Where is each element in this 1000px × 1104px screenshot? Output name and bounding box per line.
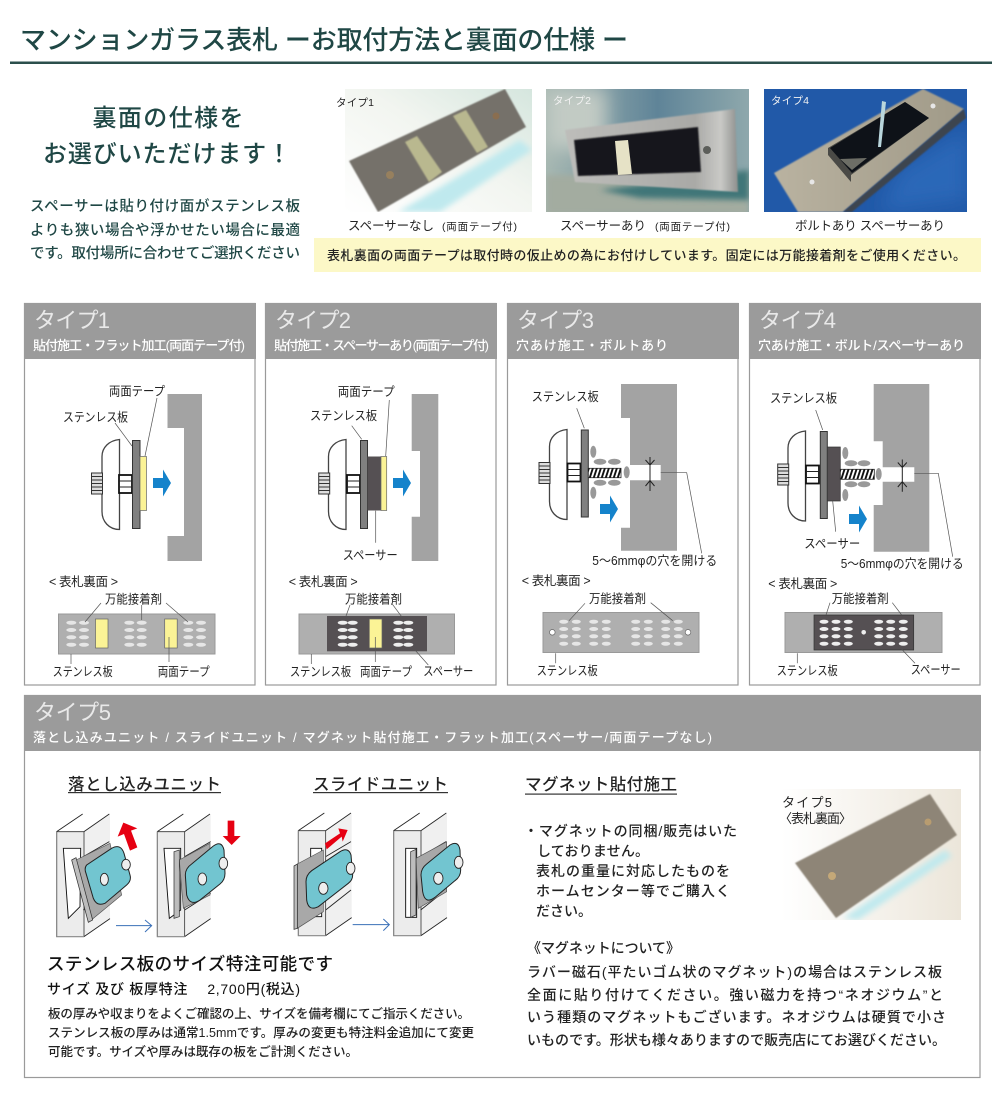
panel: type 1 — [24, 303, 256, 685]
type 3 back view: ステンレス板 — [537, 664, 598, 678]
drop-in step 1 — [57, 814, 137, 937]
type 4 mounting diagram: ステンレス板 — [770, 392, 837, 406]
magnet explanation: いう種類のマグネットもございます。ネオジウムは硬質で小さ — [527, 1009, 946, 1025]
magnet availability text: 表札の重量に対応したものを — [536, 863, 730, 879]
intro heading: お選びいただけます！ — [43, 141, 291, 168]
type 4 mounting diagram: スペーサー — [804, 537, 860, 551]
custom size note: 板の厚みや収まりをよくご確認の上、サイズを備考欄にてご指示ください。 — [48, 1006, 470, 1021]
panel: type 3 — [507, 303, 739, 685]
type 1 header — [24, 303, 256, 359]
photo label: type 4: タイプ4 — [771, 95, 809, 107]
type 2 back view: < 表札裏面 > — [289, 575, 358, 589]
photo label: type 5: タイプ5 — [782, 795, 832, 810]
type 4 mounting diagram — [770, 384, 964, 571]
magnet availability text — [524, 823, 737, 919]
callout: adhesive note — [314, 238, 981, 272]
title: マンションガラス表札 ーお取付方法と裏面の仕様 ー — [20, 25, 628, 55]
callout: adhesive note: 表札裏面の両面テープは取付時の仮止めの為にお付けしています。固定には万能接着剤をご使用ください。 — [327, 248, 966, 263]
slide step 1 — [294, 813, 355, 936]
intro text block — [30, 197, 300, 262]
type 5 header: 落とし込みユニット / スライドユニット / マグネット貼付施工・フラット加工(スペーサー/両面テープなし) — [33, 730, 712, 745]
type 1 back view: ステンレス板 — [53, 665, 113, 679]
photo: type 4 back — [764, 89, 967, 212]
type 1 back view: 両面テープ — [158, 665, 210, 679]
type 4 header: 穴あけ施工・ボルト/スペーサーあり — [758, 338, 965, 353]
photo: type 5 back — [781, 789, 961, 920]
heading: magnet mounting: マグネット貼付施工 — [525, 775, 677, 794]
photo captions: スペーサーあり — [560, 219, 646, 233]
photo label: type 5 — [779, 795, 852, 826]
photo label: type 5: 〈表札裏面〉 — [779, 811, 852, 826]
intro text block: スペーサーは貼り付け面がステンレス板 — [30, 197, 300, 215]
diagram: slide unit steps — [294, 813, 463, 936]
type 4 header — [749, 303, 981, 359]
type 4 header: タイプ4 — [759, 308, 836, 333]
panel: type 5 — [24, 695, 981, 1078]
type 2 back view: ステンレス板 — [290, 665, 351, 679]
type 2 header — [265, 303, 497, 359]
type 5 header — [24, 695, 981, 751]
photo captions: ボルトあり スペーサーあり — [795, 219, 945, 233]
panel: type 2 — [265, 303, 497, 685]
intro text block: です。取付場所に合わせてご選択ください — [30, 244, 300, 262]
type 3 mounting diagram: 5～6mmφの穴を開ける — [592, 554, 717, 568]
magnet explanation: 《マグネットについて》 — [527, 940, 680, 956]
magnet availability text: ・マグネットの同梱/販売はいた — [524, 823, 737, 839]
photo captions: (両面テープ付) — [655, 220, 730, 233]
intro heading — [43, 105, 291, 168]
type 2 mounting diagram: 両面テープ — [338, 385, 395, 399]
type 1 mounting diagram: 両面テープ — [109, 384, 165, 398]
type 4 back view: < 表札裏面 > — [768, 577, 837, 591]
type 2 mounting diagram: ステンレス板 — [310, 409, 377, 423]
magnet explanation: いものです。形状も様々ありますので販売店にてお選びください。 — [527, 1032, 946, 1048]
drop-in step 2 — [157, 814, 241, 937]
custom size note — [47, 954, 474, 1059]
type 3 header: タイプ3 — [517, 308, 594, 333]
custom size note: ステンレス板のサイズ特注可能です — [47, 954, 333, 974]
type 3 header: 穴あけ施工・ボルトあり — [516, 338, 668, 353]
type 1 back view: < 表札裏面 > — [49, 575, 118, 589]
type 1 mounting diagram: ステンレス板 — [63, 410, 128, 424]
type 2 mounting diagram: スペーサー — [343, 548, 398, 562]
photo captions — [348, 219, 945, 233]
photo label: type 1: タイプ1 — [336, 97, 374, 109]
type 4 back view — [768, 577, 961, 678]
diagram: drop-in unit steps — [57, 814, 241, 937]
type 1 mounting diagram — [63, 384, 202, 561]
type 1 back view — [49, 575, 215, 679]
type 4 back view: ステンレス板 — [777, 664, 838, 678]
type 3 back view: < 表札裏面 > — [522, 574, 591, 588]
type 4 back view: 万能接着剤 — [832, 591, 889, 606]
type 3 header — [507, 303, 739, 359]
type 3 back view — [522, 574, 699, 678]
type 4 back view: スペーサー — [911, 663, 961, 677]
heading: drop-in unit: 落とし込みユニット — [68, 775, 221, 794]
type 4 mounting diagram: 5～6mmφの穴を開ける — [841, 557, 964, 571]
arrow: drop-in sequence — [116, 920, 152, 932]
type 2 back view: 万能接着剤 — [345, 592, 402, 606]
type 1 back view: 万能接着剤 — [105, 592, 162, 606]
heading: slide unit: スライドユニット — [313, 776, 448, 794]
intro text block: よりも狭い場合や浮かせたい場合に最適 — [30, 221, 300, 239]
photo captions: (両面テープ付) — [442, 220, 517, 233]
photo label: type 2: タイプ2 — [553, 95, 591, 107]
magnet explanation: ラバー磁石(平たいゴム状のマグネット)の場合はステンレス板 — [527, 964, 942, 980]
type 3 mounting diagram — [532, 384, 717, 568]
type 3 back view: 万能接着剤 — [589, 591, 646, 606]
slide step 2 — [394, 813, 463, 936]
type 5 header: タイプ5 — [34, 700, 111, 725]
panel: type 4 — [749, 303, 981, 685]
photo captions: スペーサーなし — [348, 219, 434, 233]
type 3 mounting diagram: ステンレス板 — [532, 390, 599, 404]
type 2 header: タイプ2 — [275, 308, 351, 333]
custom size note: 可能です。サイズや厚みは既存の板をご計測ください。 — [48, 1044, 358, 1059]
type 2 back view: スペーサー — [423, 664, 473, 678]
magnet availability text: しておりません。 — [537, 843, 649, 859]
custom size note: ステンレス板の厚みは通常1.5mmです。厚みの変更も特注料金追加にて変更 — [48, 1025, 474, 1040]
magnet availability text: ださい。 — [536, 903, 592, 919]
photo: type 2 back — [546, 89, 749, 215]
custom size note: サイズ 及び 板厚特注 2,700円(税込) — [47, 981, 300, 997]
type 2 back view — [289, 575, 473, 679]
type 1 header: 貼付施工・フラット加工(両面テープ付) — [33, 338, 245, 353]
magnet explanation — [527, 940, 946, 1048]
type 2 header: 貼付施工・スペーサーあり(両面テープ付) — [274, 338, 489, 353]
magnet explanation: 全面に貼り付けてください。強い磁力を持つ“ネオジウム”と — [527, 987, 943, 1003]
magnet availability text: ホームセンター等でご購入く — [536, 883, 730, 899]
arrow: slide sequence — [353, 919, 389, 931]
type 1 header: タイプ1 — [34, 308, 110, 333]
type 2 mounting diagram — [310, 385, 438, 562]
intro heading: 裏面の仕様を — [92, 105, 244, 132]
type 2 back view: 両面テープ — [360, 665, 412, 679]
photo: type 1 back — [345, 89, 532, 212]
